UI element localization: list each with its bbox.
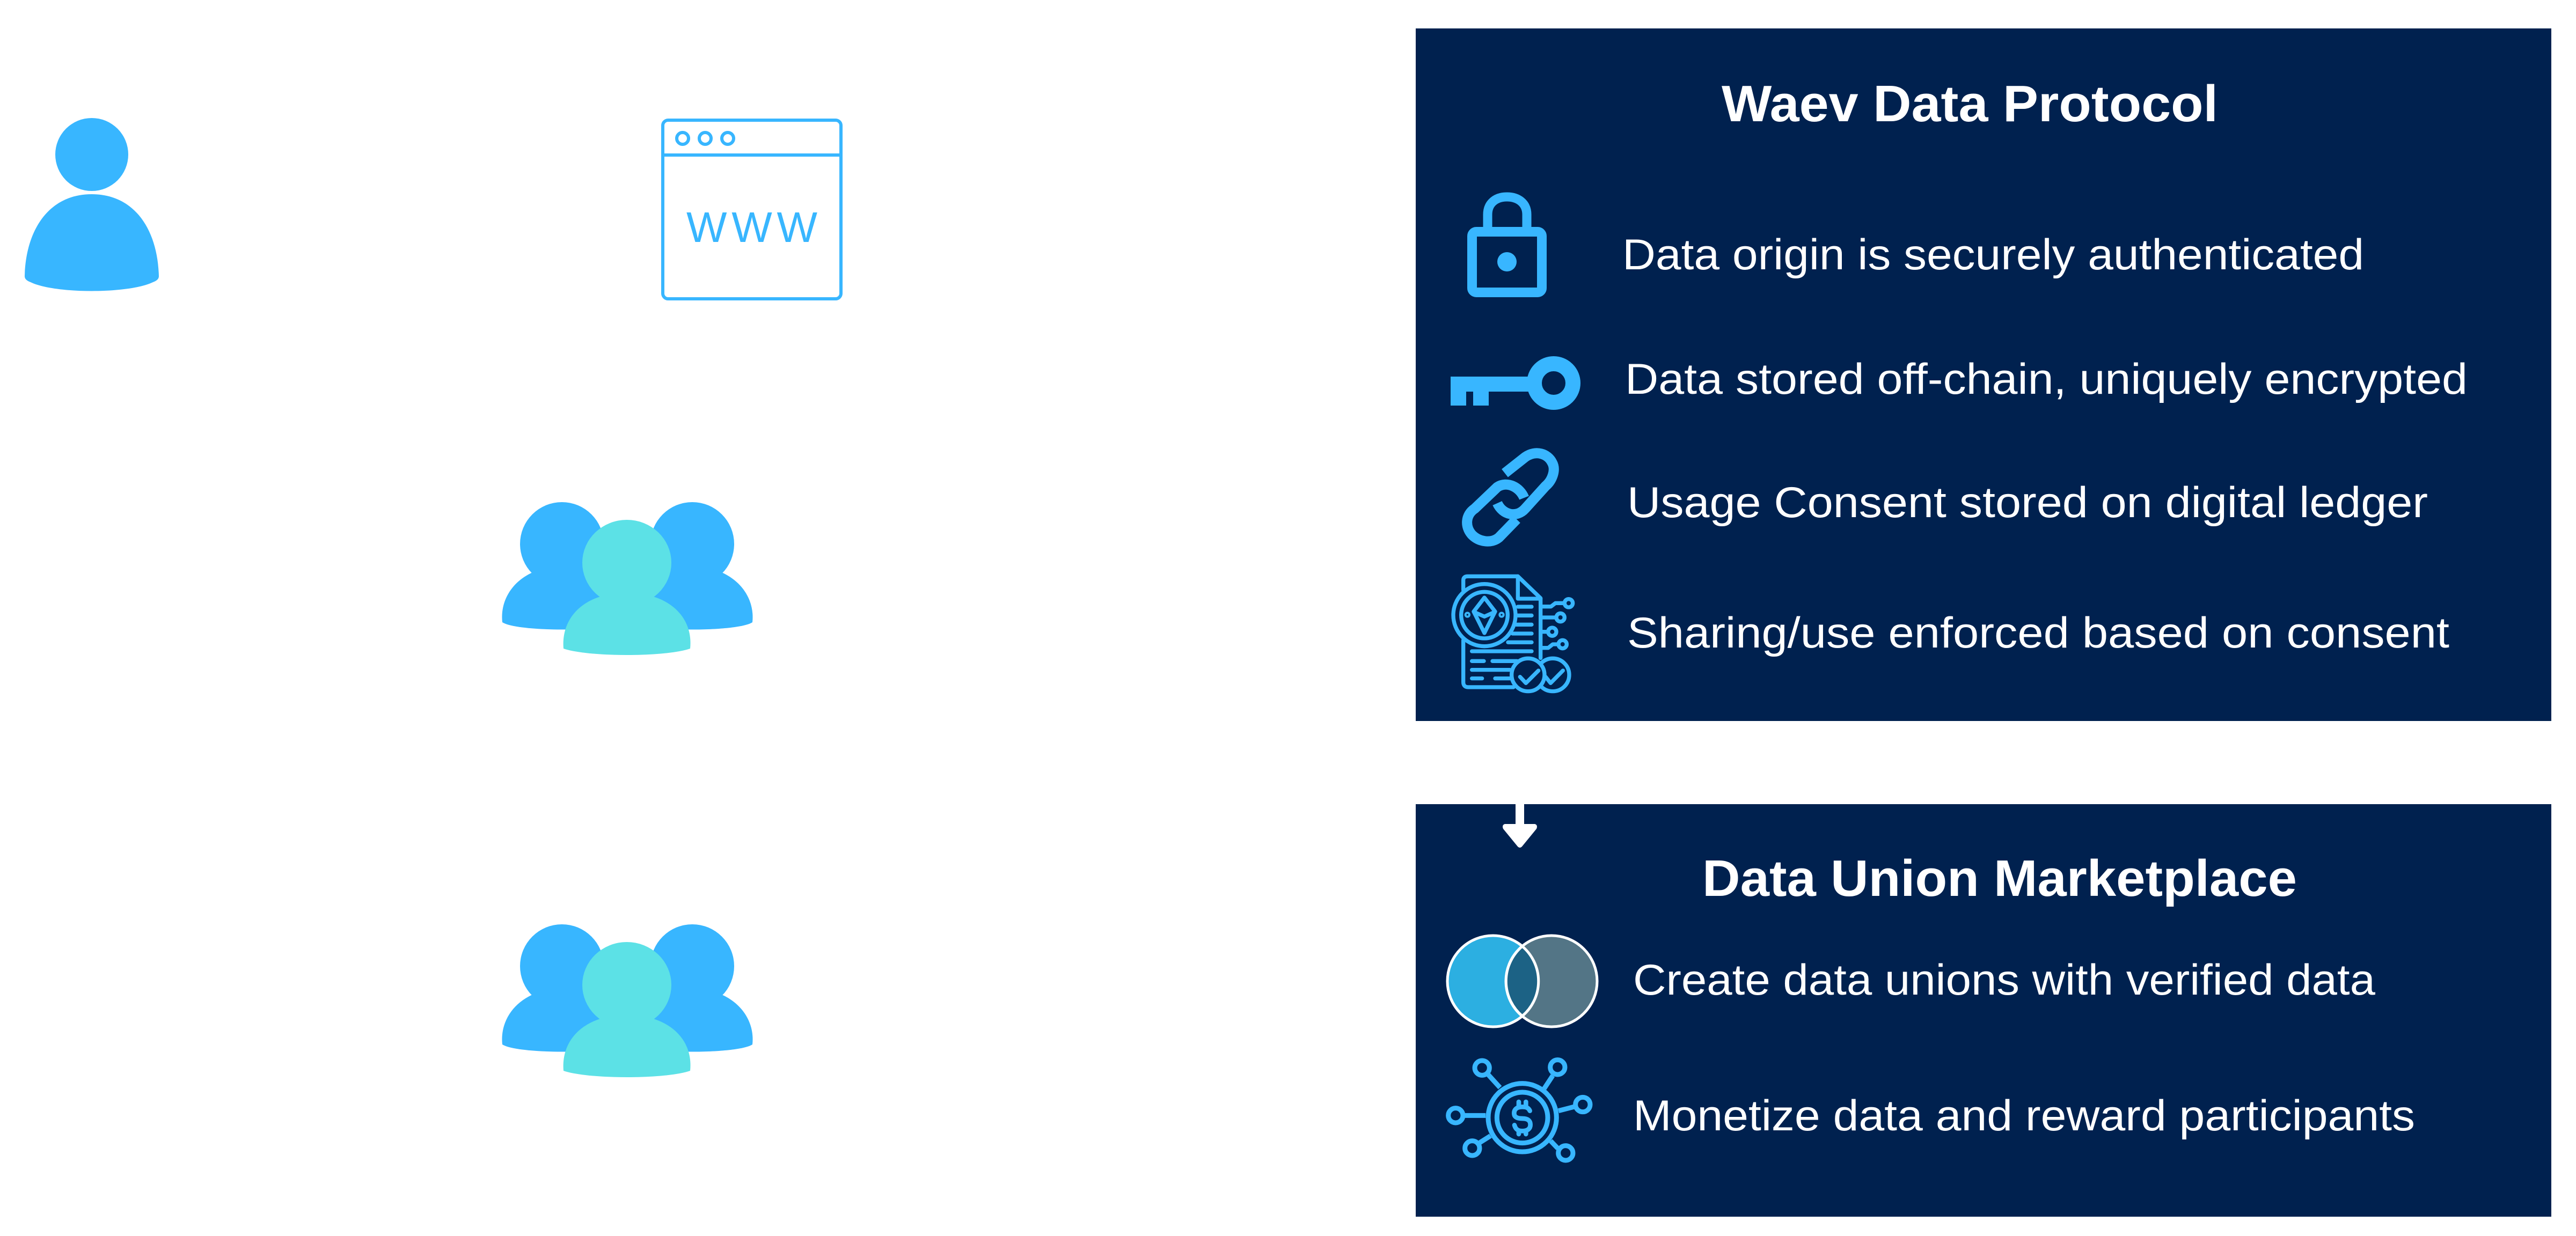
icon: venn diagram [1447,936,1597,1027]
text: data origin: Data origin is securely authenticated [1622,231,2364,279]
heading: Data Union Marketplace: Data Union Marketplace [1702,850,2297,907]
icon: user group two [502,924,753,1077]
icon: user group one [502,502,753,655]
icon: web browser window: WWW [686,203,817,251]
icon: single user [25,118,159,291]
panel: Data Union Marketplace [1416,804,2551,1217]
icon: monetization network [1448,1060,1590,1160]
arrow: down [1503,804,1537,848]
text: monetize data: Monetize data and reward participants [1633,1092,2415,1140]
icon: padlock [1472,197,1542,292]
text: sharing use: Sharing/use enforced based on consent [1627,609,2449,657]
heading: Waev Data Protocol: Waev Data Protocol [1722,75,2218,133]
icon: key [1451,364,1573,406]
icon: smart contract document [1453,576,1573,691]
panel: Waev Data Protocol [1416,28,2551,721]
text: create data unions: Create data unions with verified data [1633,956,2376,1004]
icon: web browser window [663,120,841,299]
text: data stored: Data stored off-chain, uniquely encrypted [1625,355,2468,403]
text: usage consent: Usage Consent stored on digital ledger [1627,479,2428,527]
icon: chain link [1467,453,1554,541]
